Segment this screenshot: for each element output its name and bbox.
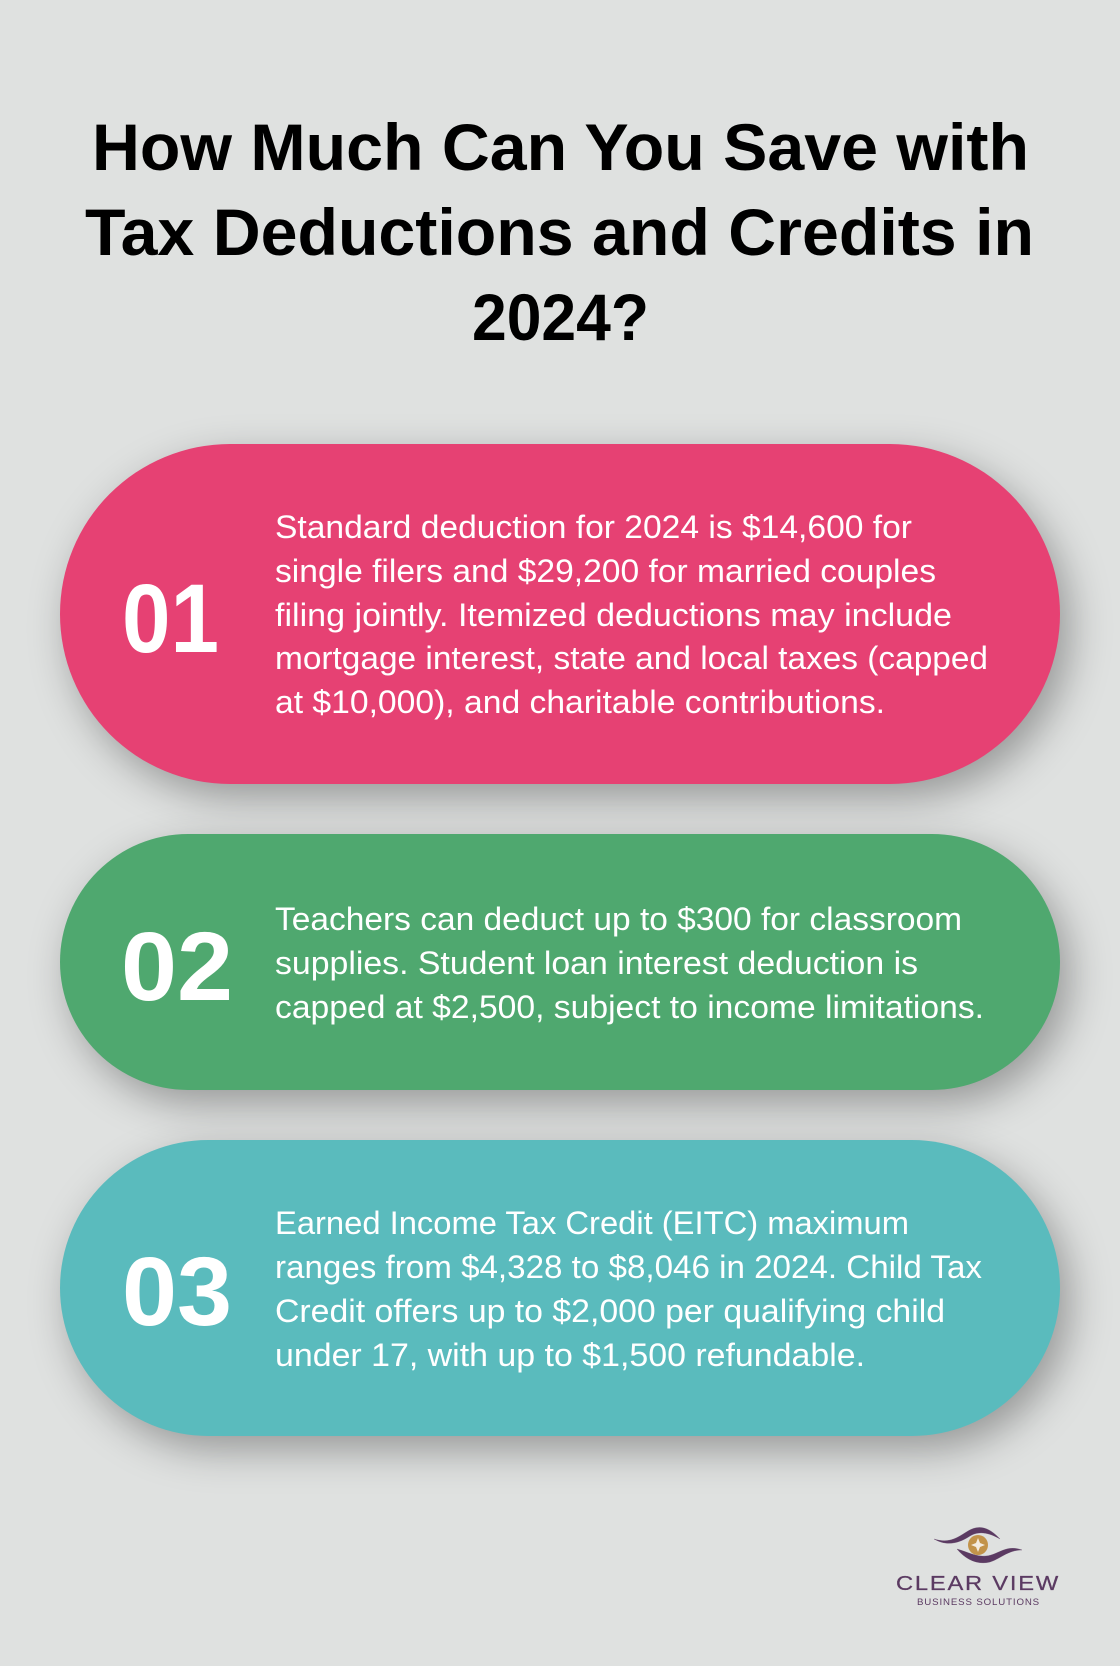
text block: step 03 — [275, 1205, 982, 1373]
title — [85, 110, 1034, 354]
text block: step 01: mortgage interest, state and local taxes (capped — [275, 640, 988, 676]
text block: step 03: Credit offers up to $2,000 per qualifying child — [275, 1293, 945, 1329]
text block: step 03: ranges from $4,328 to $8,046 in 2024. Child Tax — [275, 1249, 982, 1285]
text block: step 01: filing jointly. Itemized deductions may include — [275, 597, 952, 633]
text block: step 02 — [275, 901, 984, 1025]
pill: step 02 background — [60, 834, 1060, 1090]
text block: step 03: under 17, with up to $1,500 refundable. — [275, 1337, 865, 1373]
text block: step 01: single filers and $29,200 for married couples — [275, 553, 936, 589]
text block: step 02: capped at $2,500, subject to income limitations. — [275, 989, 984, 1025]
title: How Much Can You Save with — [92, 110, 1029, 184]
number 01: 01 — [122, 564, 219, 673]
number 03: 03 — [122, 1237, 232, 1346]
panel: step 01 — [60, 444, 1060, 784]
title: 2024? — [472, 280, 649, 354]
text block: step 01: at $10,000), and charitable contributions. — [275, 684, 885, 720]
text block: step 01: Standard deduction for 2024 is $14,600 for — [275, 509, 912, 545]
logo tagline: BUSINESS SOLUTIONS — [917, 1597, 1040, 1607]
number 02: 02 — [121, 912, 233, 1021]
logo wordmark: CLEAR VIEW — [896, 1573, 1060, 1595]
text block: step 01 — [275, 509, 988, 720]
text block: step 02: Teachers can deduct up to $300 for classroom — [275, 901, 962, 937]
pill: step 01 background — [60, 444, 1060, 784]
title: Tax Deductions and Credits in — [85, 195, 1034, 269]
text block: step 02: supplies. Student loan interest deduction is — [275, 945, 918, 981]
icon: eye with star — [934, 1527, 1022, 1563]
text block: step 03: Earned Income Tax Credit (EITC) maximum — [275, 1205, 909, 1241]
logo: Clear View Business Solutions — [896, 1527, 1060, 1607]
panel: step 03 — [60, 1140, 1060, 1436]
panel: step 02 — [60, 834, 1060, 1090]
pill: step 03 background — [60, 1140, 1060, 1436]
